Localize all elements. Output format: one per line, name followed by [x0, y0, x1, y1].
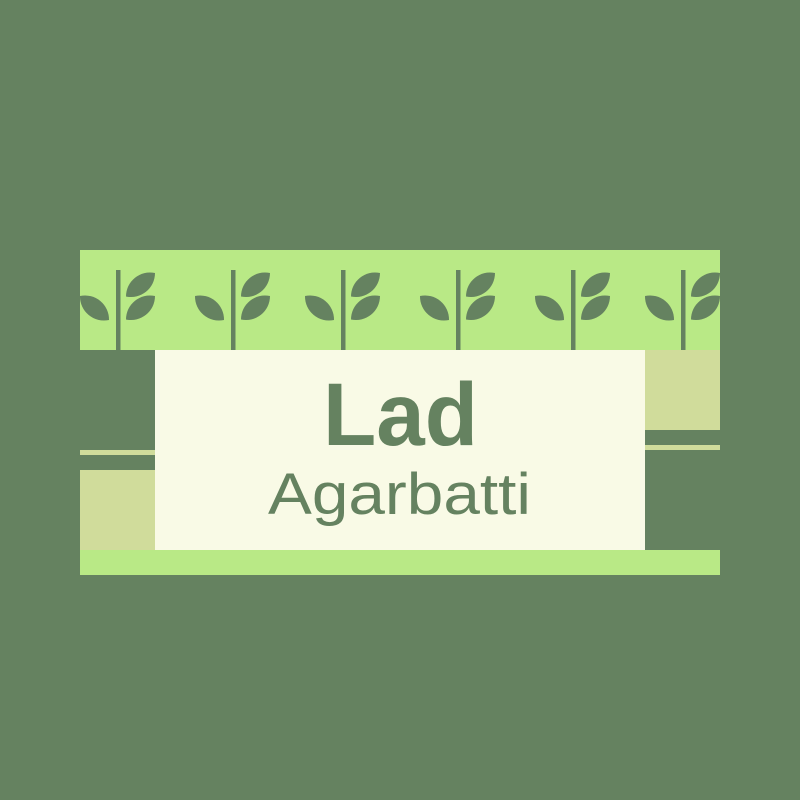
left khaki block — [80, 470, 155, 550]
right khaki block — [645, 350, 720, 430]
plant icons row — [80, 270, 720, 350]
logo infographic canvas — [80, 250, 720, 575]
title: Lad: Lad — [323, 364, 478, 464]
plant icon 5 — [535, 270, 610, 350]
top leaf band — [80, 250, 720, 350]
bottom green band — [80, 550, 720, 575]
left khaki stripe — [80, 450, 155, 455]
plant icon 3 — [305, 270, 380, 350]
subtitle: Agarbatti: Agarbatti — [268, 462, 531, 527]
central cream panel — [155, 350, 645, 550]
plant icon 1 — [80, 270, 155, 350]
plant icon 2 — [195, 270, 270, 350]
plant icon 4 — [420, 270, 495, 350]
right khaki stripe — [645, 445, 720, 450]
plant icon 6 — [645, 270, 720, 350]
